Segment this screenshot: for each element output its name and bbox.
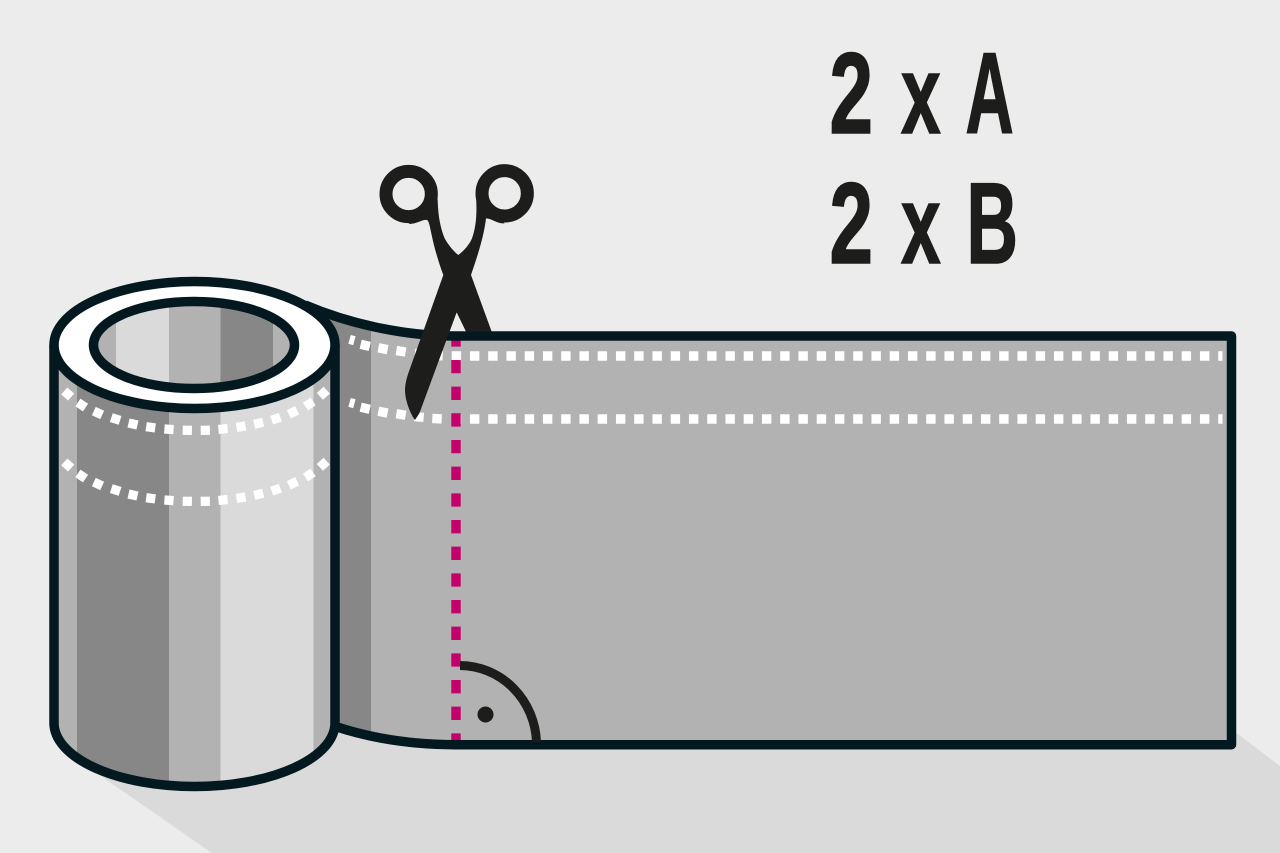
label: 2 x A: A <box>966 29 1014 157</box>
right angle marker <box>460 666 536 742</box>
sheet fill <box>305 305 1232 745</box>
icon: scissors <box>386 171 527 420</box>
label: 2 x B: 2 <box>830 159 873 288</box>
label: 2 x A <box>830 29 1014 158</box>
label: 2 x B: B <box>966 160 1018 288</box>
cylinder dotted line upper <box>61 387 330 435</box>
sheet shaded stripe <box>330 300 371 740</box>
dotted fold line lower <box>348 398 442 424</box>
magenta cut line <box>451 333 461 742</box>
cylinder dotted line lower <box>61 458 330 506</box>
roll core outline <box>94 302 294 388</box>
label: 2 x A: 2 <box>830 29 873 158</box>
roll core interior <box>98 306 290 384</box>
label: 2 x A: x <box>901 32 941 157</box>
long drop shadow <box>95 600 1280 853</box>
cylinder outline <box>54 345 335 786</box>
dotted fold line upper <box>348 335 443 360</box>
panel: unrolled material sheet <box>305 300 1232 745</box>
white roll top ring <box>54 282 335 408</box>
sheet outline <box>305 305 1232 745</box>
cylinder stripes <box>58 370 330 782</box>
panel: roll cylinder <box>50 282 340 795</box>
label: 2 x B <box>830 159 1018 288</box>
label: 2 x B: x <box>901 162 941 287</box>
